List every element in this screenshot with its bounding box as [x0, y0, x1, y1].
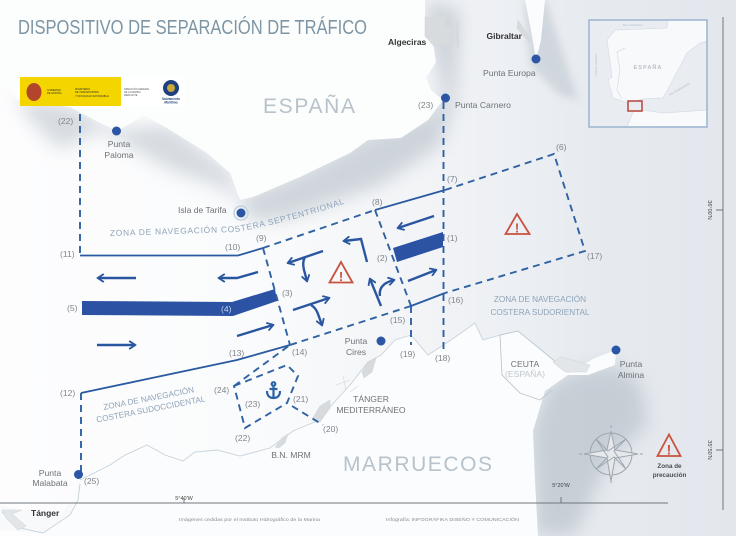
- port structures: [2, 17, 590, 530]
- place names: Punta Carnero: [455, 100, 511, 110]
- logos: MINISTERIO: [75, 87, 90, 91]
- axis: longitude: [0, 483, 668, 503]
- zone label: sudoccidental: ZONA DE NAVEGACIÓN: [102, 384, 195, 412]
- place names: Punta: [39, 468, 61, 478]
- waypoint numbers: (2): [377, 253, 388, 263]
- waypoint numbers: (18): [435, 353, 450, 363]
- axis: longitude: 5°20'W: [552, 483, 571, 489]
- Ceuta border: [500, 331, 568, 400]
- place names: Algeciras: [388, 37, 427, 47]
- zone label: sudoccidental: [93, 383, 207, 424]
- Morocco coastline: [2, 323, 500, 533]
- waypoint numbers: (9): [256, 233, 267, 243]
- waypoint numbers: (15): [390, 315, 405, 325]
- waypoint numbers: (20): [323, 424, 338, 434]
- country label: España: ESPAÑA: [263, 94, 355, 118]
- place names: B.N. MRM: [271, 450, 311, 460]
- place names: TÁNGER: [353, 394, 389, 404]
- title: DISPOSITIVO DE SEPARACIÓN DE TRÁFICO: [18, 16, 367, 39]
- place names: CEUTA: [511, 359, 540, 369]
- logos: DE TRANSPORTES: [75, 90, 99, 94]
- place names: Punta: [345, 336, 367, 346]
- waypoint numbers: (13): [229, 348, 244, 358]
- warning triangle: east: [506, 214, 530, 236]
- warning triangle: centre: !: [339, 269, 343, 284]
- waypoint numbers: (10): [225, 242, 240, 252]
- logos: Marítimo: [164, 100, 178, 104]
- axis: latitude: 35°50'N: [706, 440, 712, 460]
- inset map: [589, 20, 707, 127]
- waypoint numbers: (23): [245, 399, 260, 409]
- waypoint numbers: (11): [60, 249, 75, 259]
- waypoint numbers: (16): [448, 295, 463, 305]
- icon: anchor: [267, 382, 280, 398]
- axis: longitude: 5°40'W: [175, 496, 194, 502]
- place names: MEDITERRÁNEO: [336, 405, 406, 415]
- zone label: sudoriental: ZONA DE NAVEGACIÓN: [494, 294, 586, 304]
- axis: latitude: [706, 17, 723, 510]
- anchorage area: [234, 345, 323, 428]
- place names: Punta: [108, 139, 130, 149]
- zone label: sudoriental: COSTERA SUDORIENTAL: [490, 308, 590, 317]
- separation zone (3)-(4)-(5): [82, 289, 277, 316]
- waypoint numbers: (22): [58, 116, 73, 126]
- place names: Almina: [618, 370, 644, 380]
- land: Spain: [0, 0, 443, 200]
- waypoint numbers: (19): [400, 349, 415, 359]
- zone label: sudoriental: [490, 294, 590, 317]
- land: Morocco: [45, 323, 616, 536]
- waypoint numbers: (8): [372, 197, 383, 207]
- logos: [20, 77, 185, 106]
- place names: Tánger: [31, 508, 60, 518]
- land: Tangier peninsula: [0, 476, 80, 533]
- place names: Punta: [620, 359, 642, 369]
- place names: Isla de Tarifa: [178, 205, 227, 215]
- waypoint numbers: (4): [221, 304, 232, 314]
- waypoint numbers: (14): [292, 347, 307, 357]
- logos: DE ESPAÑA: [47, 90, 62, 95]
- legend: zona de precaución: !: [667, 442, 671, 458]
- inset map: Mar Cantábrico: [623, 23, 644, 27]
- place names: Punta Europa: [483, 68, 536, 78]
- credit: infographic: Infografía: INFOGRÁFIKA DISEÑO Y COMUNICACIÓN: [386, 516, 520, 523]
- legend: zona de precaución: [653, 434, 686, 479]
- separation zone (1)-(2): [393, 232, 443, 262]
- logos: MERCANTE: [124, 94, 138, 97]
- waypoint numbers: (25): [84, 476, 99, 486]
- waypoint numbers: [58, 100, 602, 486]
- logos: DE LA MARINA: [124, 91, 141, 94]
- place names: Paloma: [104, 150, 134, 160]
- legend: zona de precaución: Zona de: [657, 463, 682, 470]
- waypoint numbers: (7): [447, 174, 458, 184]
- waypoint numbers: (3): [282, 288, 293, 298]
- inset map: ESPAÑA: [634, 64, 662, 71]
- place names: Cires: [346, 347, 366, 357]
- warning triangle: centre: [330, 262, 352, 284]
- place names: (ESPAÑA): [505, 369, 545, 379]
- inset map: Mar Mediterráneo: [668, 81, 691, 97]
- logos: Salvamento: [162, 97, 180, 101]
- axis: latitude: 36°00'N: [706, 200, 712, 220]
- traffic direction arrows: [97, 216, 436, 345]
- waypoint numbers: (12): [60, 388, 75, 398]
- waypoint numbers: (24): [214, 385, 229, 395]
- location points: [74, 54, 620, 479]
- waypoint numbers: (5): [67, 303, 78, 313]
- waypoint numbers: (23): [418, 100, 433, 110]
- logos: GOBIERNO: [47, 88, 61, 92]
- land: Gibraltar peninsula: [525, 0, 545, 60]
- place names: Malabata: [32, 478, 68, 488]
- compass rose: [579, 425, 643, 483]
- credit: images: Imágenes cedidas por el Instituto Hidrográfico de la Marina: [179, 517, 320, 523]
- warning triangle: east: !: [515, 220, 519, 236]
- country label: Marruecos: MARRUECOS: [343, 453, 492, 476]
- logos: DIRECCIÓN GENERAL: [124, 88, 150, 91]
- legend: zona de precaución: precaución: [653, 472, 686, 479]
- inset map: Océano Atlántico: [594, 53, 598, 76]
- zone label: sudoccidental: COSTERA SUDOCCIDENTAL: [96, 394, 207, 424]
- logos: Y MOVILIDAD SOSTENIBLE: [75, 94, 109, 98]
- waypoint numbers: (17): [587, 251, 602, 261]
- waypoint numbers: (22): [235, 433, 250, 443]
- waypoint numbers: (6): [556, 142, 567, 152]
- place names: Gibraltar: [486, 31, 523, 41]
- waypoint numbers: (1): [447, 233, 458, 243]
- traffic separation boundaries: [80, 102, 585, 476]
- zone label: septentrional: ZONA DE NAVEGACIÓN COSTERA SEPTENTRIONAL: [110, 199, 344, 236]
- place names: [31, 31, 644, 518]
- waypoint numbers: (21): [293, 394, 308, 404]
